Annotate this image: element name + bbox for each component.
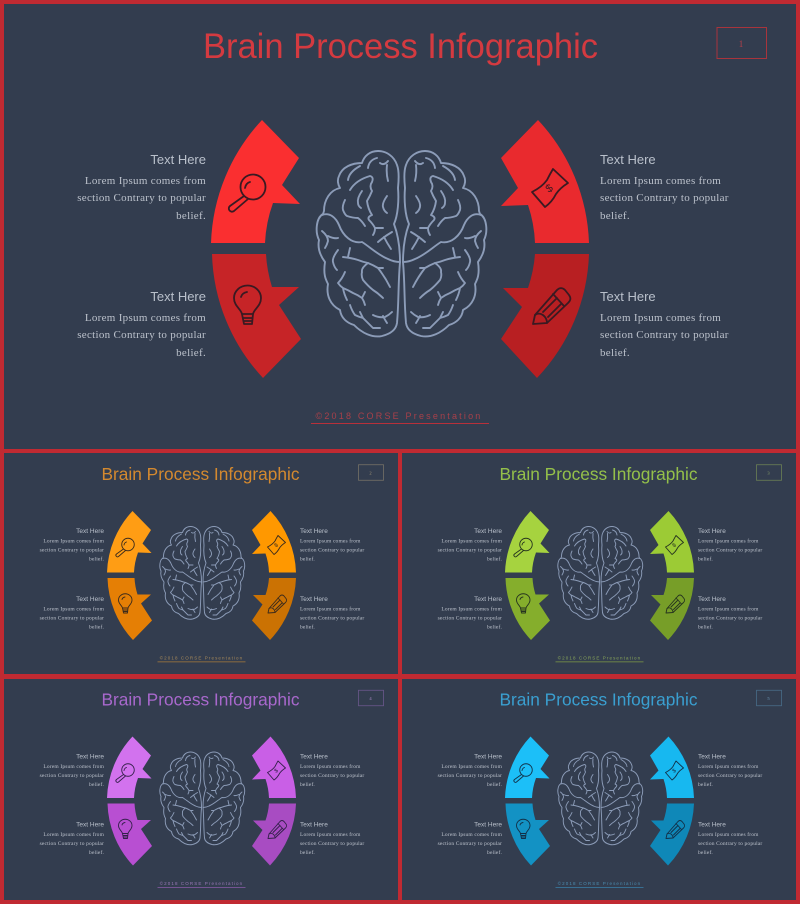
text block: bottom right: Lorem Ipsum comes from xyxy=(698,606,759,612)
segment: money, top right: $ xyxy=(274,768,280,775)
text block: top left: Lorem Ipsum comes from xyxy=(43,763,105,770)
text block: bottom left: Text Here xyxy=(474,822,502,828)
text block: bottom left: belief. xyxy=(89,849,104,856)
text block: bottom right: Lorem Ipsum comes from xyxy=(300,606,361,612)
segment: bulb, bottom left xyxy=(108,578,152,640)
text block: bottom right: section Contrary to popular xyxy=(698,841,762,847)
segment: money, top right xyxy=(650,736,694,798)
text block: top left xyxy=(438,754,503,788)
text block: bottom left xyxy=(40,596,105,630)
text block: top right xyxy=(600,152,729,222)
text block: bottom right: Lorem Ipsum comes from xyxy=(600,312,721,324)
segment: pencil, bottom right xyxy=(650,804,694,866)
footer: ©2018 CORSE Presentation xyxy=(558,654,641,660)
footer xyxy=(158,880,246,888)
footer: ©2018 CORSE Presentation xyxy=(160,654,243,660)
page number box xyxy=(756,690,782,706)
text block: bottom left: belief. xyxy=(89,624,104,630)
text block: top right: Text Here xyxy=(698,528,726,535)
text block: bottom left: section Contrary to popular xyxy=(438,841,502,847)
panel: slide 4 purple xyxy=(40,690,384,888)
page number box: 2 xyxy=(369,470,372,476)
text block: bottom right: belief. xyxy=(300,624,315,630)
text block: top left: Text Here xyxy=(474,528,502,535)
text block: top left xyxy=(40,754,105,788)
panel: slide 1 background xyxy=(4,4,796,449)
text block: top left xyxy=(77,152,206,222)
text block: bottom left: belief. xyxy=(487,624,502,630)
text block: top left: section Contrary to popular xyxy=(438,773,502,779)
segment: pencil, bottom right xyxy=(252,804,296,866)
title: Brain Process Infographic xyxy=(102,690,300,710)
segment: bulb, bottom left xyxy=(108,804,152,866)
text block: bottom left: section Contrary to popular xyxy=(438,616,502,622)
text block: top right: Lorem Ipsum comes from xyxy=(300,538,361,544)
segment: magnifier, top left xyxy=(505,511,550,572)
page number box: 5 xyxy=(767,696,770,701)
page number box: 4 xyxy=(369,696,372,701)
footer: ©2018 CORSE Presentation xyxy=(316,411,482,421)
text block: top left: Lorem Ipsum comes from xyxy=(441,763,503,770)
text block: top left: belief. xyxy=(487,781,502,788)
page number box xyxy=(756,465,782,480)
segment: pencil, bottom right xyxy=(252,578,296,640)
text block: bottom right xyxy=(300,596,364,630)
text block: bottom left: section Contrary to popular xyxy=(77,329,206,341)
segment: money, top right xyxy=(252,511,296,572)
segment: money, top right xyxy=(252,736,296,798)
text block: top right: Lorem Ipsum comes from xyxy=(300,763,361,770)
text block: bottom right: Text Here xyxy=(300,596,328,603)
text block: top right: Lorem Ipsum comes from xyxy=(698,763,759,770)
page number box: 1 xyxy=(739,39,743,49)
text block: bottom right: belief. xyxy=(698,849,713,856)
panel: slide 5 background xyxy=(402,679,796,900)
title: Brain Process Infographic xyxy=(500,690,698,710)
text block: bottom left xyxy=(40,822,105,856)
segment: money, top right: $ xyxy=(274,542,280,549)
text block: bottom right: Text Here xyxy=(300,822,328,828)
text block: top left: belief. xyxy=(176,210,206,222)
text block: top left: belief. xyxy=(89,781,104,788)
text block: bottom right: Lorem Ipsum comes from xyxy=(300,831,361,838)
text block: top left: Text Here xyxy=(76,754,104,760)
text block: bottom left: Text Here xyxy=(474,596,502,603)
page number box: 3 xyxy=(767,470,770,476)
panel: slide 3 background xyxy=(402,453,796,674)
text block: bottom right: Text Here xyxy=(698,822,726,828)
text block: top left: Text Here xyxy=(150,152,206,167)
text block: bottom right xyxy=(698,822,762,856)
text block: bottom left: Lorem Ipsum comes from xyxy=(441,606,503,612)
panel: slide 1 red xyxy=(77,27,766,424)
text block: top left: belief. xyxy=(89,556,104,562)
text block: top right: section Contrary to popular xyxy=(698,548,762,554)
text block: top right: section Contrary to popular xyxy=(300,548,364,554)
text block: top left: Lorem Ipsum comes from xyxy=(43,538,105,544)
footer: ©2018 CORSE Presentation xyxy=(160,880,243,886)
text block: bottom left xyxy=(438,596,503,630)
text block: top right xyxy=(300,754,364,788)
text block: bottom left: section Contrary to popular xyxy=(40,616,104,622)
text block: top right xyxy=(698,528,762,562)
segment: bulb, bottom left xyxy=(506,578,550,640)
text block: top right: belief. xyxy=(698,781,713,788)
text block: bottom right: belief. xyxy=(600,347,630,359)
text block: bottom left: section Contrary to popular xyxy=(40,841,104,847)
text block: bottom left: belief. xyxy=(487,849,502,856)
title: Brain Process Infographic xyxy=(500,464,698,484)
footer xyxy=(158,654,246,662)
text block: bottom right: belief. xyxy=(300,849,315,856)
text block: bottom left: Text Here xyxy=(76,822,104,828)
text block: top left: section Contrary to popular xyxy=(40,548,104,554)
footer xyxy=(556,880,644,888)
text block: bottom left: belief. xyxy=(176,347,206,359)
title: Brain Process Infographic xyxy=(203,27,598,66)
text block: bottom left: Lorem Ipsum comes from xyxy=(43,606,105,612)
text block: top right: Lorem Ipsum comes from xyxy=(600,175,721,187)
panel: slide 3 green xyxy=(438,464,782,662)
text block: top left xyxy=(438,528,503,562)
text block: top right: section Contrary to popular xyxy=(300,773,364,779)
segment: money, top right xyxy=(501,120,589,243)
text block: top right: Text Here xyxy=(600,152,656,167)
segment: magnifier, top left xyxy=(107,511,152,572)
brain xyxy=(160,526,245,619)
brain xyxy=(558,526,643,619)
text block: bottom right xyxy=(300,822,364,856)
text block: top right: Text Here xyxy=(300,528,328,535)
text block: top left: Lorem Ipsum comes from xyxy=(85,175,206,187)
text block: top left: section Contrary to popular xyxy=(40,773,104,779)
panel: slide 5 blue xyxy=(438,690,782,888)
panel: slide 2 orange xyxy=(40,464,384,662)
segment: magnifier, top left xyxy=(211,120,300,243)
text block: top right: Lorem Ipsum comes from xyxy=(698,538,759,544)
segment: magnifier, top left xyxy=(505,736,550,798)
segment: bulb, bottom left xyxy=(506,804,550,866)
text block: top right xyxy=(698,754,762,788)
text block: bottom right xyxy=(600,289,729,359)
brain xyxy=(558,752,643,845)
page number box xyxy=(717,28,766,58)
text block: bottom left: Lorem Ipsum comes from xyxy=(441,831,503,838)
text block: top right: Text Here xyxy=(698,754,726,760)
text block: bottom right xyxy=(698,596,762,630)
text block: bottom right: section Contrary to popular xyxy=(300,841,364,847)
segment: money, top right: $ xyxy=(672,768,678,775)
text block: top right: section Contrary to popular xyxy=(698,773,762,779)
text block: bottom left xyxy=(438,822,503,856)
segment: pencil, bottom right xyxy=(650,578,694,640)
segment: money, top right: $ xyxy=(672,542,678,549)
text block: top left: belief. xyxy=(487,556,502,562)
text block: bottom left: Text Here xyxy=(76,596,104,603)
text block: top left xyxy=(40,528,105,562)
text block: bottom left: Lorem Ipsum comes from xyxy=(85,312,206,324)
text block: bottom right: Text Here xyxy=(698,596,726,603)
text block: bottom right: section Contrary to popular xyxy=(600,329,729,341)
title: Brain Process Infographic xyxy=(102,464,300,484)
text block: top right: belief. xyxy=(300,556,315,562)
text block: top right: belief. xyxy=(300,781,315,788)
text block: top left: Lorem Ipsum comes from xyxy=(441,538,503,544)
text block: bottom right: section Contrary to popular xyxy=(698,616,762,622)
segment: pencil, bottom right xyxy=(501,254,589,378)
text block: top right xyxy=(300,528,364,562)
text block: top left: Text Here xyxy=(474,754,502,760)
page number box xyxy=(358,690,384,706)
text block: top right: belief. xyxy=(600,210,630,222)
text block: bottom right: belief. xyxy=(698,624,713,630)
brain xyxy=(160,752,245,845)
footer: ©2018 CORSE Presentation xyxy=(558,880,641,886)
page number box xyxy=(358,465,384,480)
segment: magnifier, top left xyxy=(107,736,152,798)
panel: slide 4 background xyxy=(4,679,398,900)
brain xyxy=(317,151,486,336)
text block: bottom left: Lorem Ipsum comes from xyxy=(43,831,105,838)
text block: top right: section Contrary to popular xyxy=(600,192,729,204)
text block: bottom right: Text Here xyxy=(600,289,656,304)
text block: bottom left: Text Here xyxy=(150,289,206,304)
text block: top right: belief. xyxy=(698,556,713,562)
text block: top right: Text Here xyxy=(300,754,328,760)
segment: money, top right: $ xyxy=(544,182,556,195)
text block: bottom right: Lorem Ipsum comes from xyxy=(698,831,759,838)
text block: top left: Text Here xyxy=(76,528,104,535)
text block: top left: section Contrary to popular xyxy=(77,192,206,204)
text block: bottom right: section Contrary to popular xyxy=(300,616,364,622)
segment: bulb, bottom left xyxy=(212,254,301,378)
panel: slide 2 background xyxy=(4,453,398,674)
segment: money, top right xyxy=(650,511,694,572)
footer xyxy=(556,654,644,662)
text block: top left: section Contrary to popular xyxy=(438,548,502,554)
text block: bottom left xyxy=(77,289,206,359)
